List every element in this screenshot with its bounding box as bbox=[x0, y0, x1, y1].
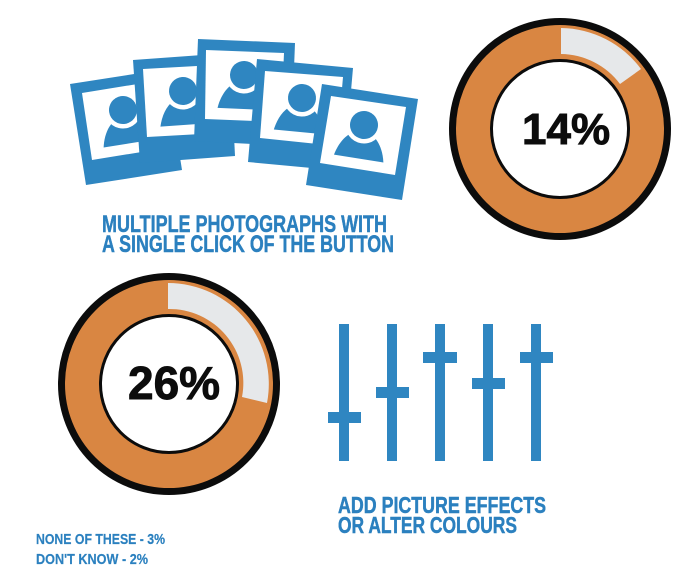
photo 4 bbox=[248, 59, 353, 171]
slider 1 bbox=[328, 324, 361, 461]
caption: picture effects bbox=[338, 492, 546, 538]
icon: fan of five photographs bbox=[70, 39, 418, 200]
photo 3 bbox=[194, 39, 295, 146]
donut chart: 26% bbox=[62, 276, 276, 492]
slider 4 bbox=[472, 324, 505, 461]
footnote: other responses bbox=[36, 531, 165, 568]
icon: five adjustment sliders bbox=[328, 324, 553, 461]
caption: multiple photographs: A SINGLE CLICK OF THE BUTTON bbox=[102, 231, 394, 258]
slider 5 bbox=[520, 324, 553, 461]
caption: multiple photographs bbox=[102, 211, 394, 258]
wedge: 26% share bbox=[168, 283, 269, 403]
slider 3 bbox=[423, 324, 457, 461]
caption: picture effects: ADD PICTURE EFFECTS bbox=[338, 492, 546, 518]
caption: multiple photographs: MULTIPLE PHOTOGRAPHS WITH bbox=[102, 211, 387, 238]
value: 26%: 26% bbox=[128, 357, 220, 409]
photo 5 bbox=[306, 84, 418, 200]
footnote: other responses: NONE OF THESE - 3% bbox=[36, 531, 165, 548]
slider 2 bbox=[376, 324, 409, 461]
photo 1 bbox=[70, 69, 182, 185]
photo 2 bbox=[133, 53, 235, 163]
donut chart: 14% bbox=[452, 22, 668, 236]
value: 14%: 14% bbox=[522, 105, 610, 154]
footnote: other responses: DON'T KNOW - 2% bbox=[36, 551, 148, 568]
caption: picture effects: OR ALTER COLOURS bbox=[338, 512, 517, 538]
wedge: 14% share bbox=[561, 28, 641, 84]
